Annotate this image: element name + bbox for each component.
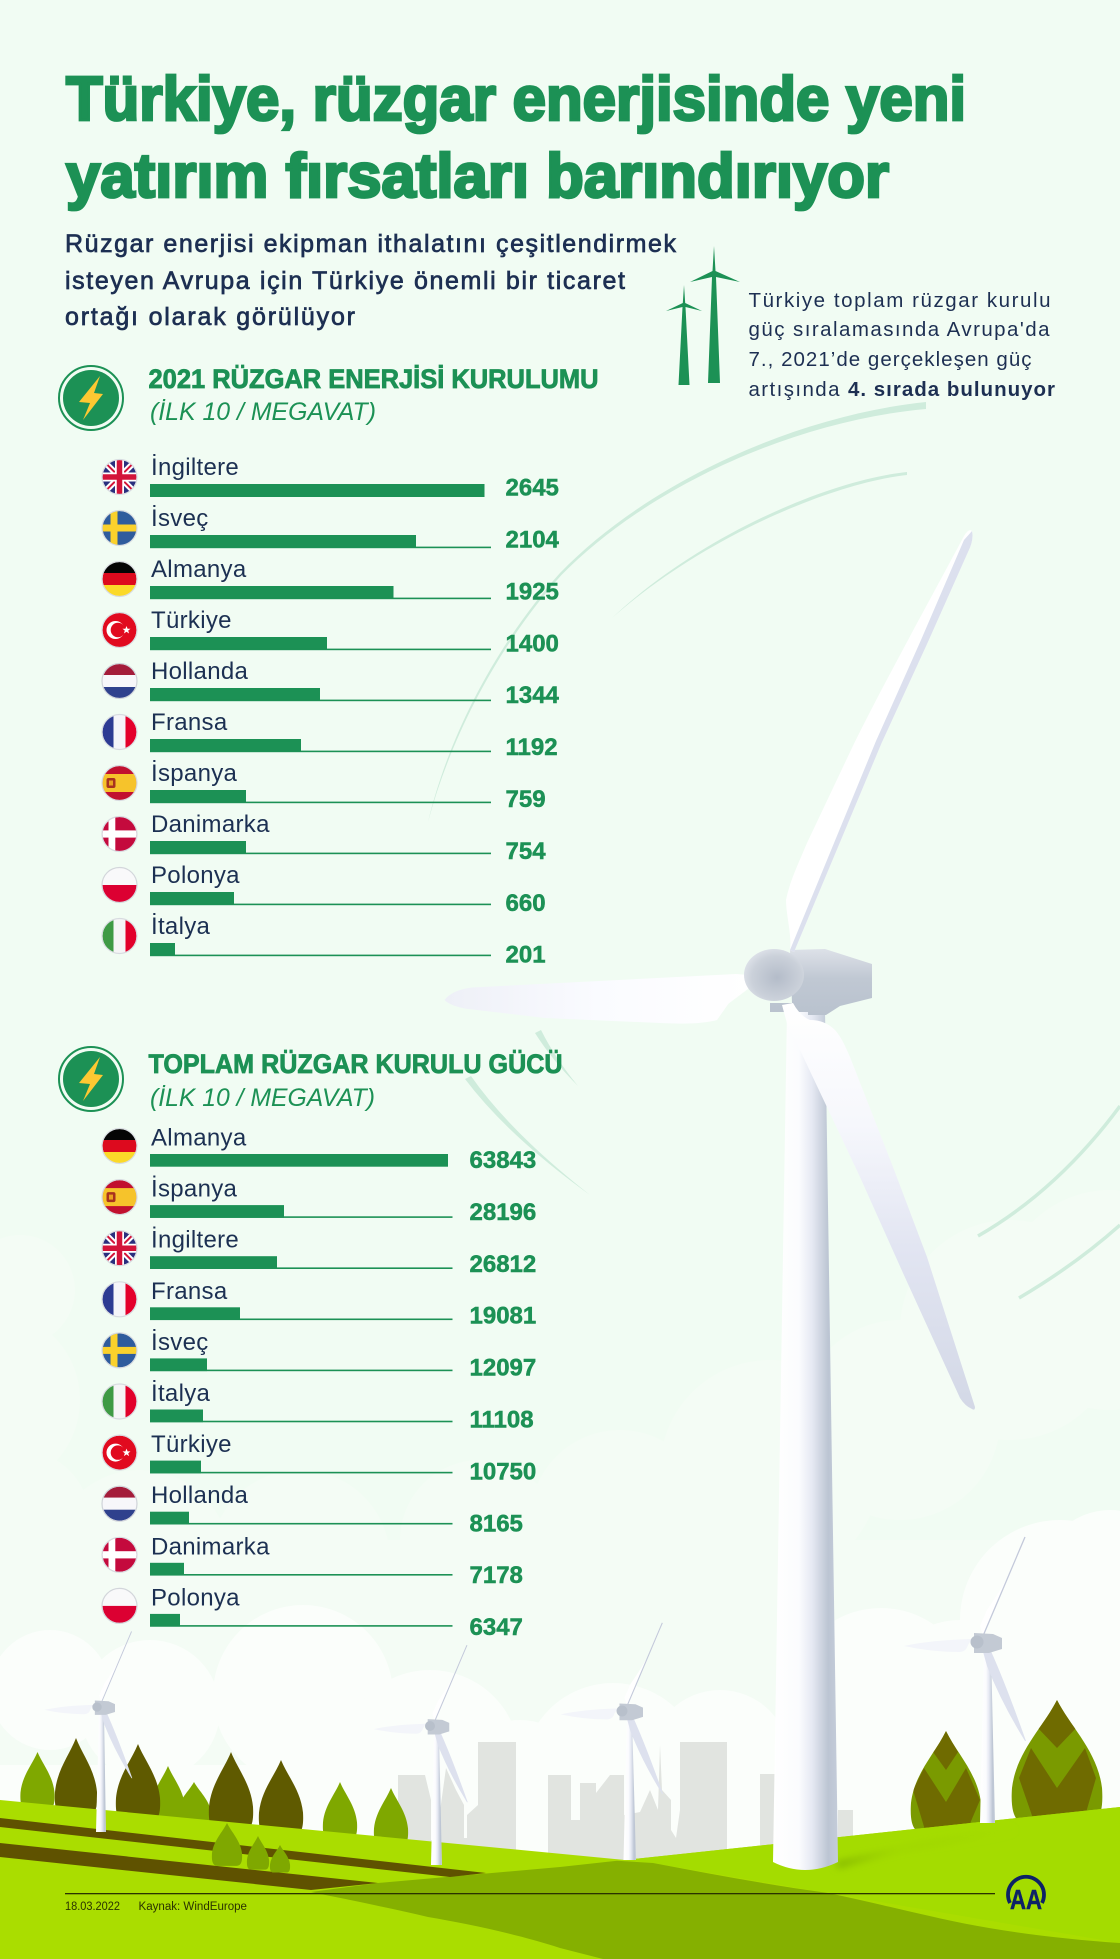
row: Türkiye: 10750 [470, 1458, 536, 1485]
subtitle: isteyen Avrupa için Türkiye önemli bir ticaret [65, 267, 625, 295]
row: İngiltere [102, 1227, 536, 1278]
ground hills [0, 1800, 1120, 1959]
section header: 2021 kurulum [59, 364, 598, 430]
row: Fransa [102, 709, 558, 761]
tower [773, 1010, 838, 1870]
row: Türkiye [102, 1431, 536, 1485]
row: İtalya [102, 1380, 534, 1434]
subtitle [65, 230, 676, 331]
row: İtalya: 201 [506, 942, 546, 969]
logo: AA: AA [1010, 1884, 1042, 1915]
row: İspanya: 759 [506, 786, 546, 813]
row: Polonya: 660 [506, 890, 546, 917]
icon: energy bolt [59, 366, 123, 430]
title [66, 65, 966, 211]
row: İtalya: İtalya [151, 913, 211, 940]
row: Hollanda: Hollanda [151, 1482, 248, 1509]
row: İsveç: İsveç [151, 505, 209, 532]
callout: Türkiye ranking: Türkiye toplam rüzgar kurulu [748, 289, 1050, 312]
row: Danimarka: 7178 [470, 1562, 523, 1589]
row: İspanya [102, 1176, 536, 1226]
small turbine 1 [44, 1631, 132, 1832]
row: İsveç: 12097 [470, 1355, 536, 1382]
large chevron tree B [1012, 1700, 1102, 1830]
row: İngiltere [102, 454, 559, 502]
row: Fransa: Fransa [151, 1278, 228, 1305]
icon: twin wind turbines [666, 246, 740, 385]
main wind turbine [444, 530, 975, 1870]
row: Danimarka: Danimarka [151, 811, 270, 838]
row: Hollanda: 8165 [470, 1510, 523, 1537]
row: Almanya: Almanya [151, 556, 247, 583]
row: Hollanda: 1344 [506, 682, 560, 709]
row: Türkiye [102, 607, 559, 657]
row: Polonya [102, 862, 546, 917]
section header: toplam kurulu güç: TOPLAM RÜZGAR KURULU GÜCÜ [148, 1049, 562, 1079]
subtitle: Rüzgar enerjisi ekipman ithalatını çeşitlendirmek [65, 230, 676, 258]
row: Polonya: 6347 [470, 1614, 523, 1641]
row: İsveç: 2104 [506, 526, 560, 554]
callout: Türkiye ranking [748, 289, 1055, 401]
footer date and source: 18.03.2022 [65, 1901, 120, 1913]
large chevron tree A [910, 1731, 980, 1829]
row: İspanya: İspanya [151, 760, 238, 787]
title: yatırım fırsatları barındırıyor [66, 142, 889, 211]
row: İngiltere: 2645 [506, 475, 559, 502]
clouds: back layer [0, 1190, 1120, 1800]
row: Polonya: Polonya [151, 1584, 240, 1611]
row: İngiltere: 26812 [470, 1251, 536, 1278]
row: Hollanda: Hollanda [151, 658, 248, 685]
callout: Türkiye ranking: 7., 2021’de gerçekleşen güç [748, 348, 1032, 371]
row: Fransa: 1192 [506, 734, 558, 761]
row: Almanya [102, 1124, 536, 1174]
row: İtalya: İtalya [151, 1380, 211, 1407]
row: Hollanda [102, 1482, 523, 1537]
row: İspanya: İspanya [151, 1176, 238, 1203]
row: Danimarka: 754 [506, 838, 546, 865]
logo: AA [1008, 1877, 1044, 1915]
callout: Türkiye ranking: 4. sırada bulunuyor [848, 378, 1055, 401]
row: Fransa: Fransa [151, 709, 228, 736]
row: Fransa: 19081 [470, 1303, 536, 1330]
row: İngiltere: İngiltere [151, 454, 239, 481]
row: Fransa [102, 1278, 536, 1330]
row: Almanya: Almanya [151, 1124, 247, 1152]
section header: 2021 kurulum: (İLK 10 / MEGAVAT) [150, 398, 376, 426]
bar chart: total installed capacity [102, 1124, 536, 1641]
blade: downward [782, 1003, 975, 1410]
row: İsveç [102, 1329, 536, 1382]
row: İsveç [102, 505, 560, 554]
row: İngiltere: İngiltere [151, 1227, 239, 1254]
row: Danimarka [102, 1533, 523, 1589]
row: İtalya [102, 913, 546, 969]
row: İspanya: 28196 [470, 1199, 536, 1226]
hub [744, 949, 804, 1001]
footer rule [65, 1893, 995, 1894]
title: Türkiye, rüzgar enerjisinde yeni [66, 65, 966, 134]
subtitle: ortağı olarak görülüyor [65, 303, 355, 331]
footer date and source [65, 1901, 247, 1913]
section header: toplam kurulu güç: (İLK 10 / MEGAVAT) [150, 1084, 375, 1112]
row: Almanya: 63843 [470, 1147, 536, 1174]
row: Polonya: Polonya [151, 862, 240, 889]
footer date and source: Kaynak: WindEurope [138, 1901, 247, 1913]
row: Hollanda [102, 658, 560, 709]
row: Türkiye: Türkiye [151, 1431, 232, 1458]
callout: Türkiye ranking: güç sıralamasında Avrupa'da [748, 318, 1050, 341]
clouds: front layer [0, 1510, 1120, 1900]
nacelle [770, 949, 872, 1015]
city skyline [398, 1742, 853, 1860]
row: Polonya [102, 1584, 523, 1641]
small turbine 2 [374, 1645, 468, 1865]
row: İtalya: 11108 [470, 1406, 534, 1434]
row: Danimarka [102, 811, 546, 865]
row: İspanya [102, 760, 546, 813]
small turbine 4 [904, 1537, 1026, 1823]
section header: toplam kurulu güç [59, 1047, 562, 1112]
row: Türkiye: 1400 [506, 630, 559, 657]
row: Danimarka: Danimarka [151, 1533, 270, 1560]
small turbine 3 [561, 1623, 663, 1860]
icon: energy bolt [59, 1047, 123, 1111]
trees behind the hill [20, 1738, 408, 1845]
decorative wind arcs [428, 402, 1120, 1298]
blade: upward [786, 530, 972, 952]
section header: 2021 kurulum: 2021 RÜZGAR ENERJİSİ KURULUMU [148, 364, 598, 394]
small front trees [212, 1823, 290, 1873]
row: Türkiye: Türkiye [151, 607, 232, 634]
blade: left [444, 974, 750, 1024]
row: İsveç: İsveç [151, 1329, 209, 1356]
row: Almanya: 1925 [506, 578, 559, 605]
callout: Türkiye ranking: artışında [748, 378, 840, 401]
bar chart: 2021 installations [102, 454, 560, 969]
row: Almanya [102, 556, 559, 605]
